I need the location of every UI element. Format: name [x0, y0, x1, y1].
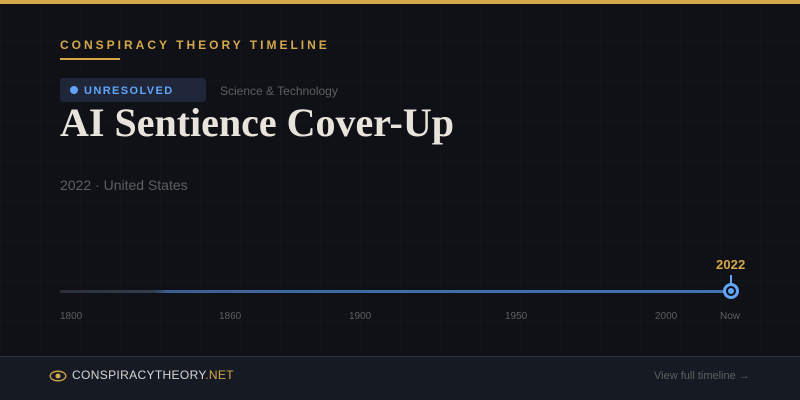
- timeline link: View full timeline →: [654, 370, 750, 382]
- eyebrow heading: CONSPIRACY THEORY TIMELINE: [60, 38, 330, 52]
- timeline chart: [60, 257, 745, 299]
- category label: Science & Technology: [220, 84, 338, 98]
- status label: UNRESOLVED: [84, 85, 174, 97]
- status dot: [70, 86, 78, 94]
- footer bar: [0, 356, 800, 400]
- axis label 1900: 1900: [349, 311, 371, 322]
- axis label 2000: 2000: [655, 311, 677, 322]
- date and location: 2022 · United States: [60, 177, 188, 193]
- icon: eye: [50, 370, 66, 382]
- heading underline: [60, 58, 120, 60]
- title: AI Sentience Cover-Up: [60, 100, 454, 145]
- top accent bar: [0, 0, 800, 4]
- axis label 1860: 1860: [219, 311, 241, 322]
- marker year: 2022: [716, 257, 745, 272]
- axis label 1800: 1800: [60, 311, 82, 322]
- marker ring: [723, 283, 739, 299]
- site name: CONSPIRACYTHEORY.NET: [72, 368, 234, 382]
- timeline track: [60, 290, 731, 293]
- axis label 1950: 1950: [505, 311, 527, 322]
- marker stem: [730, 275, 732, 287]
- marker centre: [728, 288, 734, 294]
- axis label Now: Now: [720, 311, 740, 322]
- status badge: [60, 78, 206, 102]
